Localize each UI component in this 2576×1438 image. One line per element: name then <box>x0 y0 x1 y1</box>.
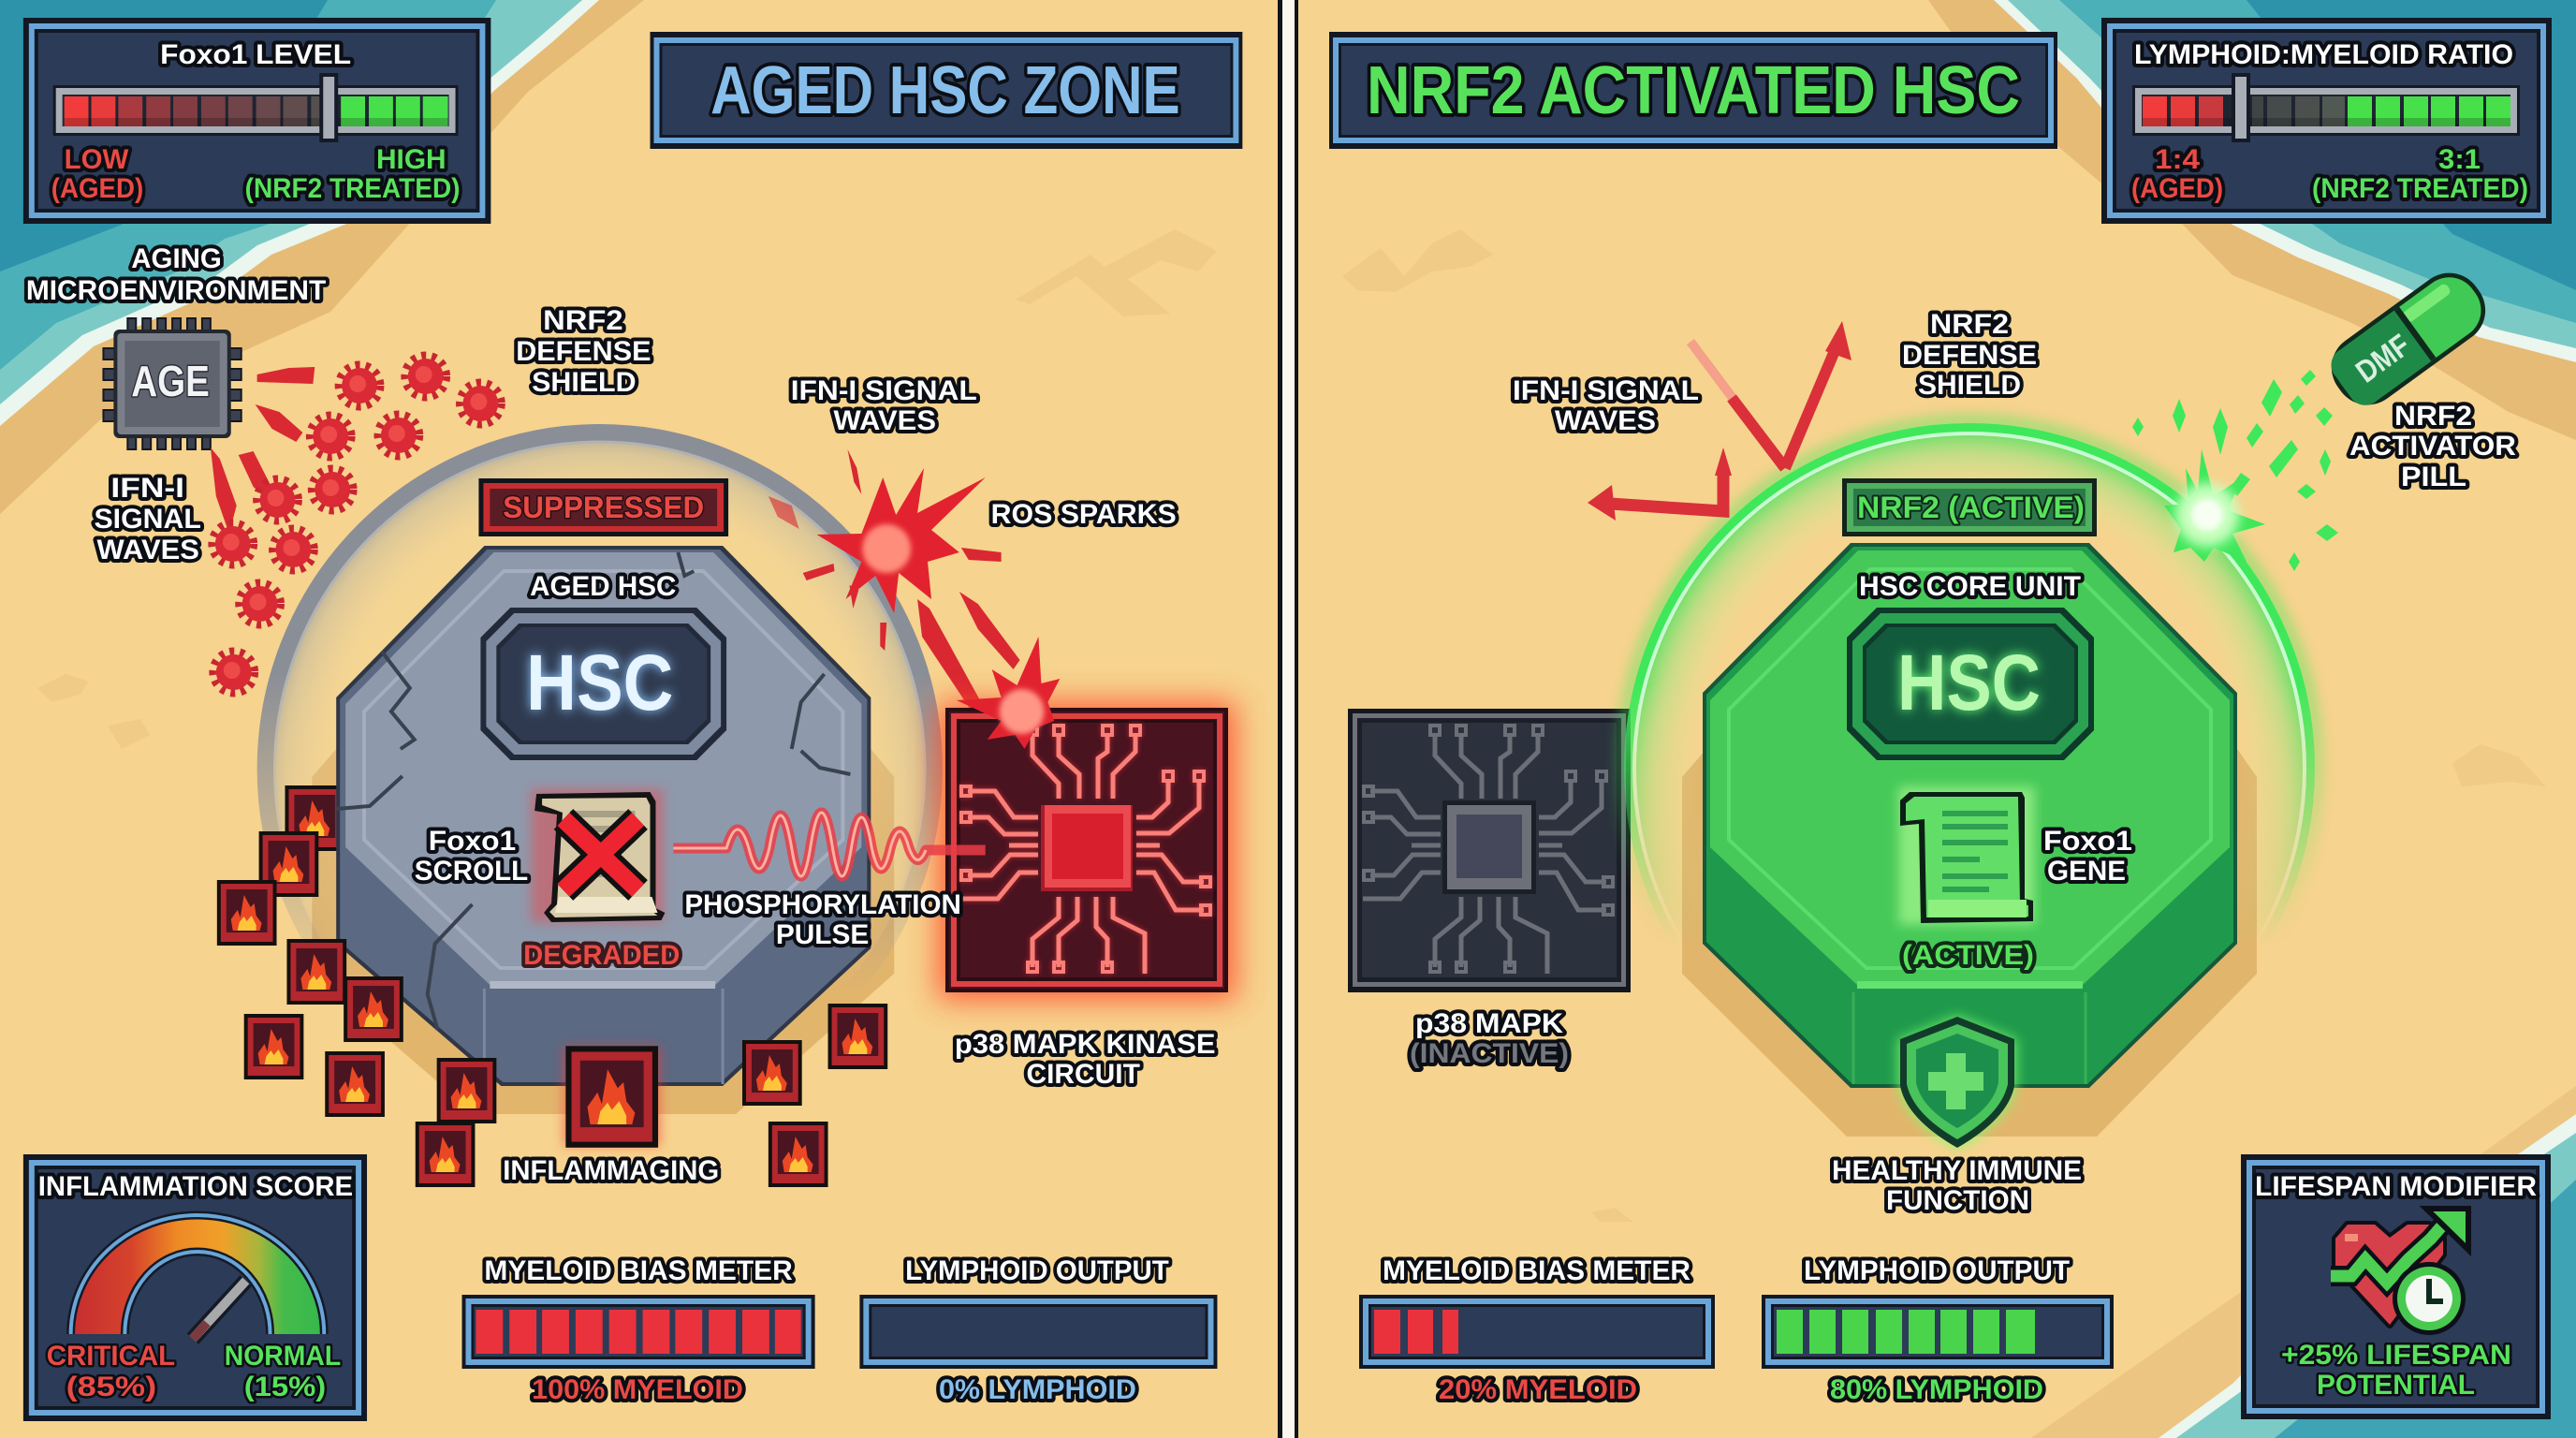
label: healthy immune function: HEALTHY IMMUNE <box>1832 1155 2082 1186</box>
HSC badge (active): HSC <box>1897 638 2041 726</box>
label: healthy immune function: FUNCTION <box>1886 1185 2029 1216</box>
aged ratio label <box>2131 144 2223 204</box>
meter: myeloid bias treated <box>1359 1255 1715 1405</box>
aged ratio label: 1:4 <box>2155 144 2200 175</box>
label: HSC core unit: HSC CORE UNIT <box>1859 571 2081 602</box>
label: aged HSC: AGED HSC <box>530 571 676 602</box>
label: IFN-I signal waves (right): WAVES <box>1555 405 1656 436</box>
label: aging microenvironment: MICROENVIRONMENT <box>26 275 326 306</box>
HSC badge (aged) <box>480 608 726 760</box>
heading: Foxo1 level: Foxo1 LEVEL <box>160 39 351 70</box>
panel: title NRF2 activated HSC <box>1329 32 2057 149</box>
flame boxes: inflammaging cluster <box>217 831 887 1187</box>
heading: myeloid bias meter: MYELOID BIAS METER <box>484 1255 793 1286</box>
aged ratio label: (AGED) <box>2131 173 2223 204</box>
value: 80% lymphoid: 80% LYMPHOID <box>1830 1374 2043 1405</box>
phosphorylation pulse wave <box>673 813 986 876</box>
heading: inflammation score: INFLAMMATION SCORE <box>38 1171 353 1202</box>
value: 0% lymphoid: 0% LYMPHOID <box>939 1374 1136 1405</box>
panel: inflammation score <box>23 1154 367 1421</box>
large inflammaging flame box <box>564 1046 660 1148</box>
HSC badge (aged): HSC <box>526 638 673 726</box>
heading: aged HSC zone: AGED HSC ZONE <box>710 53 1180 128</box>
icon: immune shield <box>1897 1015 2017 1150</box>
IFN-I signal shards and virus particles <box>211 356 501 693</box>
label: Foxo1 gene: GENE <box>2047 856 2126 887</box>
slider bar <box>53 73 459 142</box>
green activator sparkle <box>2132 370 2338 571</box>
icon: degraded Foxo1 scroll <box>531 789 665 922</box>
label: IFN-I signal waves (left): WAVES <box>96 535 199 565</box>
meter: lymphoid output aged <box>859 1255 1217 1405</box>
label: IFN-I signal waves (top): IFN-I SIGNAL <box>791 375 977 406</box>
ratio slider bar <box>2132 73 2520 142</box>
low label: LOW <box>65 144 129 175</box>
panel: lifespan modifier <box>2241 1154 2551 1419</box>
label: IFN-I signal waves (right): IFN-I SIGNAL <box>1513 375 1699 406</box>
label: p38 MAPK kinase circuit: CIRCUIT <box>1026 1059 1140 1090</box>
critical label: CRITICAL <box>47 1341 175 1372</box>
label: Foxo1 gene: Foxo1 <box>2043 826 2132 857</box>
NRF2 active text: NRF2 (ACTIVE) <box>1857 491 2085 524</box>
label: active: (ACTIVE) <box>1902 940 2034 971</box>
icon: AGE chip <box>103 318 242 449</box>
heading: lifespan modifier: LIFESPAN MODIFIER <box>2255 1171 2537 1202</box>
label: p38 MAPK inactive <box>1410 1008 1569 1069</box>
normal label <box>225 1341 341 1402</box>
high label: HIGH <box>376 144 446 175</box>
meter: myeloid bias aged <box>462 1255 815 1405</box>
label: NRF2 defense shield (aged) <box>516 305 651 398</box>
sand shadow under aged HSC <box>312 749 894 1114</box>
p38 MAPK chip (inactive) <box>1348 709 1631 992</box>
label: Foxo1 scroll <box>415 826 528 887</box>
critical label <box>47 1341 175 1402</box>
lifespan value text: +25% LIFESPAN <box>2281 1340 2511 1371</box>
low label <box>51 144 143 204</box>
heading: lymphoid myeloid ratio: LYMPHOID:MYELOID RATIO <box>2134 39 2513 70</box>
label: NRF2 activator pill: ACTIVATOR <box>2349 431 2516 462</box>
label: p38 MAPK kinase circuit <box>955 1029 1215 1090</box>
sand shadow under active HSC <box>1682 749 2257 1137</box>
panel: Foxo1 level <box>23 18 490 224</box>
treated ratio label: 3:1 <box>2438 144 2481 175</box>
panel: title aged HSC zone <box>651 32 1242 149</box>
suppressed text: SUPPRESSED <box>503 491 704 524</box>
label: NRF2 activator pill <box>2349 401 2516 492</box>
meter: lymphoid output treated <box>1762 1255 2114 1405</box>
second ROS burst on circuit <box>957 637 1060 749</box>
value: 100% myeloid: 100% MYELOID <box>532 1374 743 1405</box>
label: NRF2 activator pill: PILL <box>2401 462 2466 492</box>
aged HSC octagon <box>336 546 871 1086</box>
label: healthy immune function <box>1832 1155 2082 1216</box>
label: NRF2 defense shield (aged): NRF2 <box>543 305 623 336</box>
label: IFN-I signal waves (left): IFN-I <box>110 473 184 504</box>
cracks <box>336 552 850 1030</box>
label: phosphorylation pulse <box>684 889 961 950</box>
label: degraded: DEGRADED <box>523 940 680 971</box>
label: IFN-I signal waves (top) <box>791 375 977 436</box>
icon: active Foxo1 gene scroll <box>1898 786 2035 925</box>
high label: (NRF2 TREATED) <box>245 173 461 204</box>
low label: (AGED) <box>51 173 143 204</box>
beach: bottom-right sea <box>2031 1086 2576 1438</box>
heading: lymphoid output: LYMPHOID OUTPUT <box>1804 1255 2070 1286</box>
panel: lymphoid myeloid ratio <box>2101 18 2552 224</box>
label: Foxo1 scroll: Foxo1 <box>429 826 516 857</box>
aged HSC zone side <box>23 18 1242 1421</box>
NRF2 defense shield (weakened dome) <box>256 424 943 964</box>
heading: lymphoid output: LYMPHOID OUTPUT <box>905 1255 1169 1286</box>
NRF2 defense shield (active dome) <box>1610 407 2330 934</box>
arrows: deflected IFN-I signals <box>1588 321 1852 521</box>
treated ratio label: (NRF2 TREATED) <box>2312 173 2528 204</box>
label: ROS sparks: ROS SPARKS <box>991 499 1177 530</box>
label: NRF2 defense shield (active): DEFENSE <box>1902 340 2037 371</box>
heading: NRF2 activated HSC: NRF2 ACTIVATED HSC <box>1367 53 2020 128</box>
high label <box>245 144 461 204</box>
badge: NRF2 active <box>1842 478 2097 536</box>
label: IFN-I signal waves (left): SIGNAL <box>94 504 201 535</box>
divider between panels <box>1278 0 1298 1438</box>
treated ratio label <box>2312 144 2528 204</box>
label: Foxo1 scroll: SCROLL <box>415 856 528 887</box>
label: IFN-I signal waves (left) <box>94 473 201 565</box>
icon: heart, arrow and clock <box>2331 1209 2468 1335</box>
heading: myeloid bias meter: MYELOID BIAS METER <box>1383 1255 1690 1286</box>
label: aging microenvironment: AGING <box>131 243 222 274</box>
label: NRF2 defense shield (active): SHIELD <box>1918 370 2021 401</box>
label: p38 MAPK kinase circuit: p38 MAPK KINASE <box>955 1029 1215 1060</box>
label: NRF2 defense shield (active) <box>1902 309 2037 401</box>
label: NRF2 defense shield (aged): SHIELD <box>532 367 637 398</box>
label: NRF2 activator pill: NRF2 <box>2394 401 2472 432</box>
label: inflammaging: INFLAMMAGING <box>503 1155 719 1186</box>
lifespan value text: POTENTIAL <box>2317 1370 2475 1401</box>
p38 MAPK kinase circuit (active) <box>938 702 1236 1000</box>
flame box behind aged HSC <box>285 785 344 851</box>
HSC badge (aged): HSC <box>526 638 673 726</box>
label: NRF2 defense shield (active): NRF2 <box>1930 309 2009 340</box>
icon: DMF activator pill <box>2319 260 2498 418</box>
faint dunes <box>37 229 2546 1222</box>
label: p38 MAPK inactive: (INACTIVE) <box>1410 1038 1569 1069</box>
active HSC octagon <box>1703 543 2237 1150</box>
HSC badge (active): HSC <box>1897 638 2041 726</box>
badge: suppressed <box>478 478 728 536</box>
label: NRF2 defense shield (aged): DEFENSE <box>516 336 651 367</box>
ROS sparks burst <box>768 449 1020 721</box>
critical label: (85%) <box>66 1372 156 1402</box>
AGE text: AGE <box>131 357 210 405</box>
beach: top-left sea <box>0 0 644 514</box>
label: Foxo1 gene <box>2043 826 2132 887</box>
beach: top-right sea <box>1928 0 2576 440</box>
label: phosphorylation pulse: PHOSPHORYLATION <box>684 889 961 920</box>
normal label: (15%) <box>244 1372 326 1402</box>
inflammation gauge <box>71 1215 324 1339</box>
value: 20% myeloid: 20% MYELOID <box>1439 1374 1637 1405</box>
HSC badge (active) <box>1847 608 2094 760</box>
DMF text: DMF <box>2349 329 2417 390</box>
label: phosphorylation pulse: PULSE <box>776 919 869 950</box>
label: p38 MAPK inactive: p38 MAPK <box>1415 1008 1563 1039</box>
label: IFN-I signal waves (right) <box>1513 375 1699 436</box>
label: aging microenvironment <box>26 243 326 306</box>
normal label: NORMAL <box>225 1341 341 1372</box>
label: IFN-I signal waves (top): WAVES <box>834 405 936 436</box>
lifespan value text <box>2281 1340 2511 1401</box>
